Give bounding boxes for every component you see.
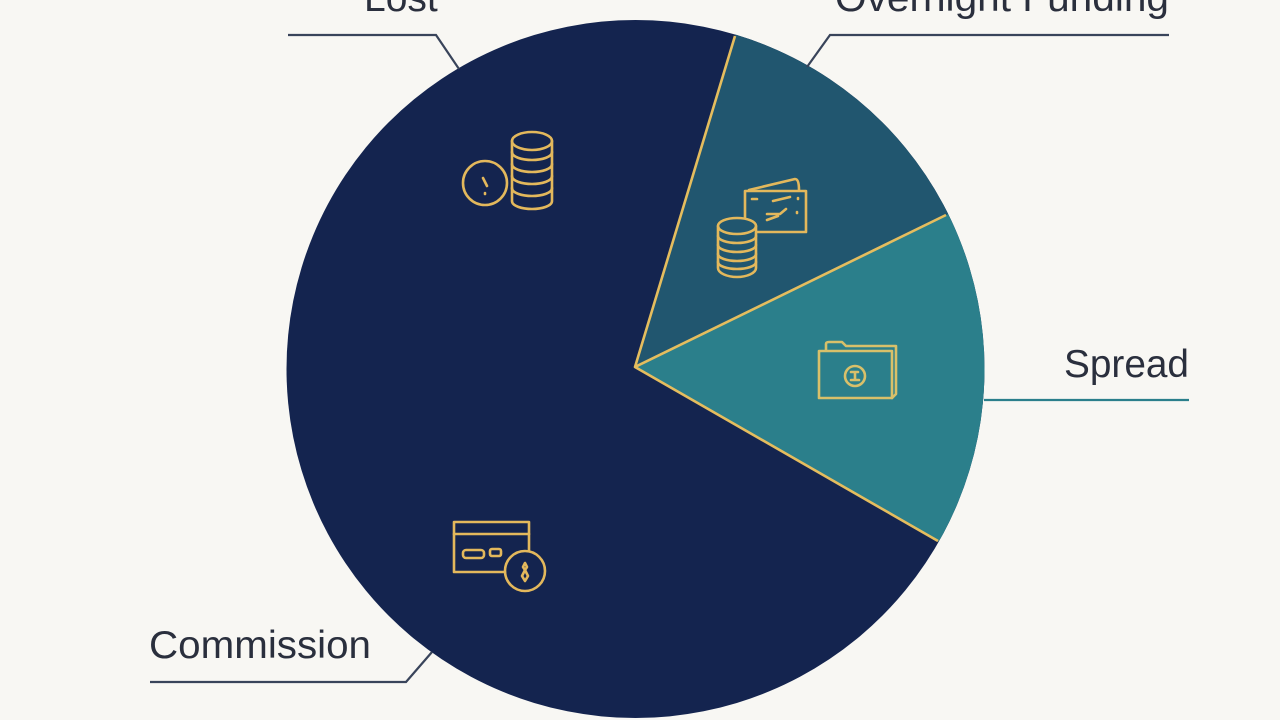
slice borders xyxy=(635,36,946,541)
slice: Spread xyxy=(638,214,984,542)
icon: coin and coin stack xyxy=(463,132,552,209)
slice: Overnight Funding xyxy=(637,34,948,364)
label: Overnight Funding xyxy=(807,0,1169,67)
leader line: Spread xyxy=(984,399,1189,401)
icon: card and coin xyxy=(454,522,545,591)
icon: banknotes and coin stack xyxy=(718,179,806,277)
leader line: Commission xyxy=(150,652,432,682)
label: Commission: Commission xyxy=(149,624,371,667)
slice: Lost and Commission xyxy=(286,20,984,718)
icon: folder xyxy=(819,342,896,398)
pie chart xyxy=(286,3,1035,718)
label: Commission xyxy=(149,624,432,682)
label: Lost xyxy=(288,0,459,69)
leader line: Overnight Funding xyxy=(807,35,1169,67)
label: Spread: Spread xyxy=(1064,343,1189,386)
leader line: Lost xyxy=(288,35,459,69)
